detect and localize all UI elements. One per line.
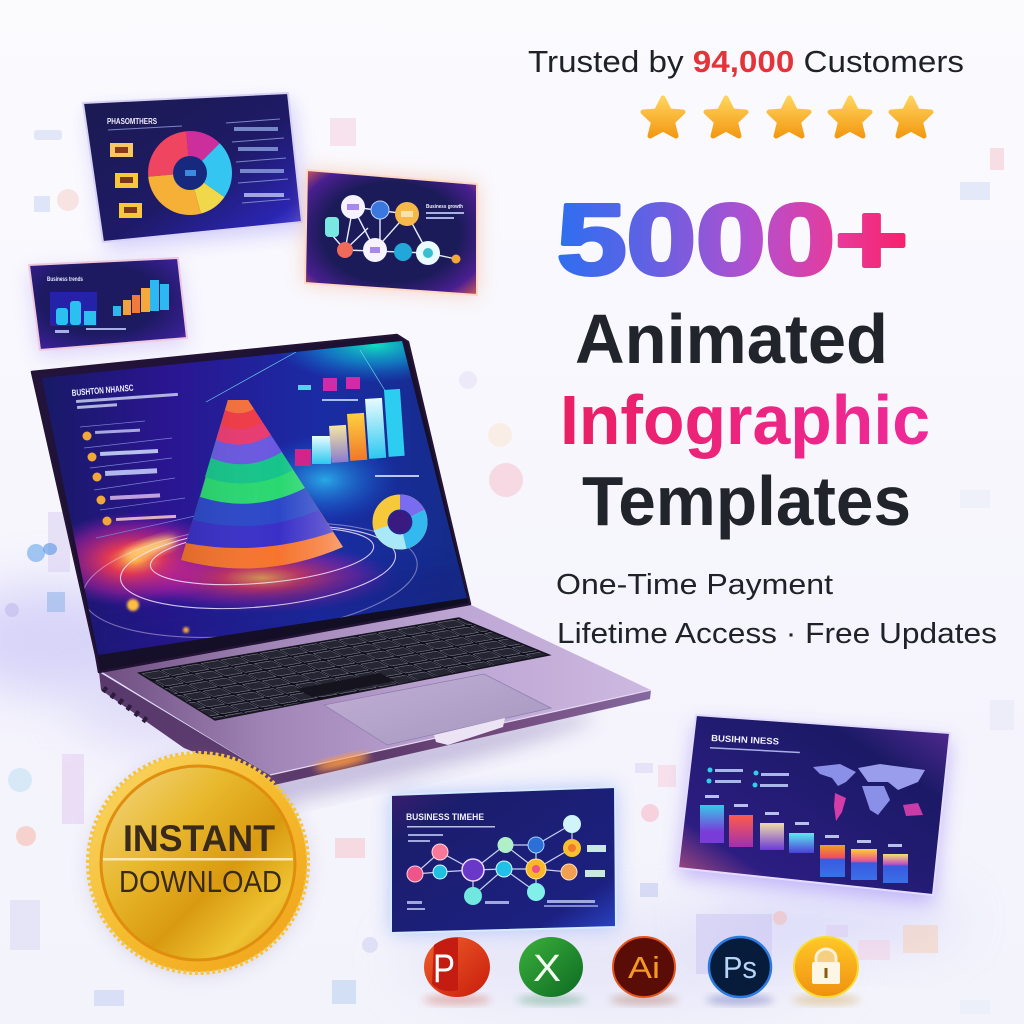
icon: Illustrator (610, 937, 678, 1005)
screen donut chart (380, 502, 420, 542)
laptop front notch (434, 718, 505, 745)
heading: Templates: Templates (582, 462, 911, 540)
trackpad (324, 674, 551, 745)
trust line: Trusted by 94,000 Customers: Trusted by 94,000 Customers (528, 44, 964, 79)
comparison bars (700, 795, 908, 883)
badge text: INSTANT: INSTANT (123, 818, 275, 859)
pyramid chart (181, 400, 343, 568)
icon row: software formats (423, 937, 860, 1005)
screen bar chart (295, 377, 419, 477)
panel: world map dashboard slide (678, 715, 950, 903)
heading: Infographic: Infographic (560, 381, 930, 459)
panel: bar chart slide (29, 258, 187, 356)
world map (813, 764, 925, 821)
icon: PowerPoint: P (433, 947, 455, 991)
icon: gold padlock (792, 937, 860, 1005)
badge: instant download seal (88, 753, 308, 974)
donut chart (148, 131, 232, 215)
network diagram (325, 195, 460, 265)
badge text: DOWNLOAD: DOWNLOAD (119, 864, 282, 899)
screen list (80, 421, 195, 538)
headline number 5000+: 5000+ (557, 184, 908, 296)
panel: donut chart slide: PHASOMTHERS (107, 117, 158, 126)
panel: node network slide (305, 170, 477, 295)
keyboard (139, 618, 549, 720)
bar chart (113, 280, 169, 316)
panel: world map dashboard slide: BUSIHN INESS (711, 733, 779, 747)
laptop (30, 334, 651, 811)
benefit: One-Time Payment: One-Time Payment (556, 569, 833, 601)
icon: PowerPoint (423, 937, 491, 1005)
icon: Excel (517, 937, 585, 1005)
heading: Animated: Animated (575, 300, 888, 378)
screen title: BUSHTON NHANSC (71, 383, 134, 398)
panel: business network slide: BUSINESS TIMEHE (406, 812, 484, 822)
five star rating (643, 98, 931, 136)
network timeline diagram (407, 815, 606, 905)
laptop lid (32, 335, 470, 672)
laptop screen (42, 341, 467, 655)
panel: bar chart slide: Business trends (47, 277, 84, 283)
panel: business network slide (391, 787, 616, 933)
benefit: Lifetime Access and Free Updates: Lifetime Access · Free Updates (557, 618, 997, 650)
panel: donut chart slide (83, 93, 306, 250)
icon: Excel: X (533, 948, 561, 990)
panel: node network slide: Business growth (426, 204, 463, 210)
icon: Photoshop (706, 937, 774, 1005)
laptop base (99, 604, 651, 785)
icon: Illustrator: Ai (628, 950, 660, 985)
icon: Photoshop: Ps (723, 950, 757, 985)
